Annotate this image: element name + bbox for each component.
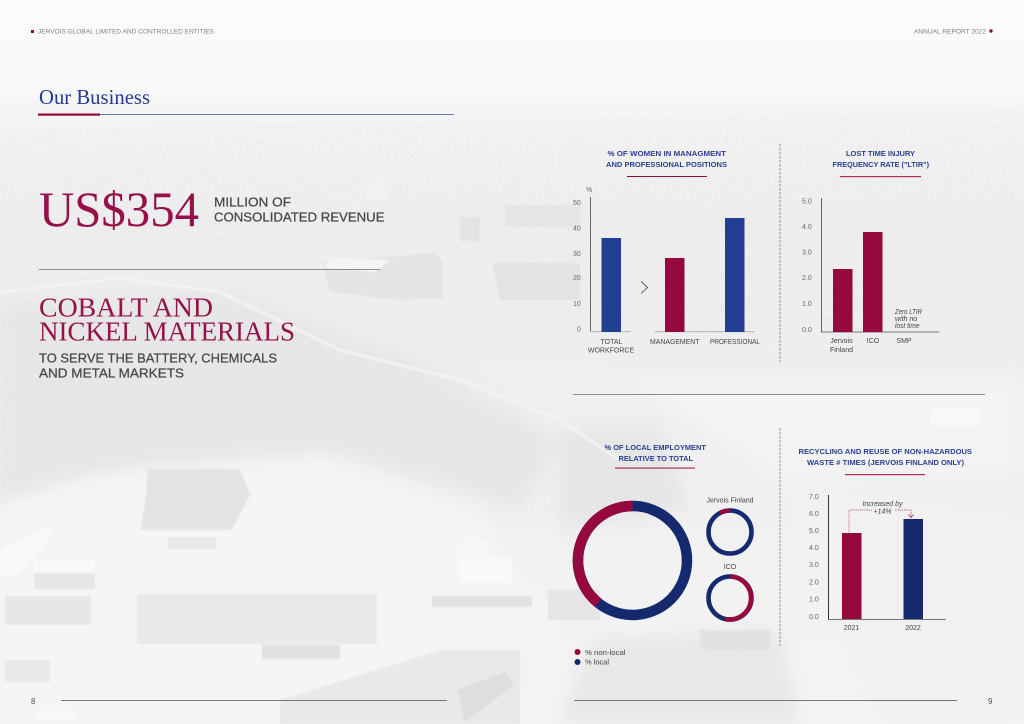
y axis: women: 10 [573, 301, 581, 308]
chart heading: LTIR: LOST TIME INJURY [846, 149, 915, 158]
note: zero LTIR: with no [895, 316, 917, 323]
chart heading: women [606, 149, 727, 177]
x labels: recycling: 2021 [844, 625, 859, 632]
forest texture [0, 110, 1024, 520]
y axis: LTIR: 5.0 [802, 198, 812, 206]
legend: % local [585, 660, 609, 666]
header: right running title: ANNUAL REPORT 2022 [914, 28, 986, 36]
y axis: women: 50 [573, 200, 581, 207]
x labels: LTIR: SMP [896, 338, 912, 345]
x labels: women: PROFESSIONAL [710, 339, 760, 346]
headline: cobalt and nickel materials: NICKEL MATERIALS [39, 316, 295, 346]
bars: LTIR [833, 232, 882, 332]
chart heading: local employment [604, 443, 706, 469]
panel: women in management chart [573, 149, 760, 354]
x labels: recycling [844, 625, 921, 632]
header: left running title: JERVOIS GLOBAL LIMITED AND CONTROLLED ENTITIES [38, 28, 215, 36]
note: zero LTIR: Zero LTIR [894, 309, 922, 316]
y axis: LTIR [802, 198, 939, 334]
x labels: LTIR [830, 338, 912, 354]
y axis: recycling: 0.0 [809, 614, 819, 621]
chart heading: local employment: RELATIVE TO TOTAL [618, 454, 693, 463]
y axis: recycling: 1.0 [809, 596, 819, 604]
x labels: women: TOTAL [601, 339, 623, 346]
chart heading: local employment: % OF LOCAL EMPLOYMENT [604, 443, 706, 452]
x labels: LTIR: Jervois [830, 338, 853, 345]
label: Jervois Finland: Jervois Finland [706, 498, 754, 504]
annotation: increased by 14% [849, 501, 914, 532]
chart heading: recycling: RECYCLING AND REUSE OF NON-HAZARDOUS [798, 447, 972, 456]
buildings and roads [323, 253, 443, 300]
annotation: increased by 14%: +14% [873, 508, 892, 516]
label: ICO: ICO [724, 564, 737, 571]
x labels: recycling: 2022 [905, 625, 921, 632]
chart heading: LTIR: FREQUENCY RATE ("LTIR") [832, 160, 929, 169]
footer: right page number: 9 [988, 697, 993, 706]
x labels: women: WORKFORCE [588, 348, 634, 354]
y axis: women: 40 [573, 226, 581, 232]
chart heading: women: AND PROFESSIONAL POSITIONS [606, 160, 727, 169]
y axis: women [573, 187, 755, 334]
y axis: women: 20 [573, 275, 581, 282]
y axis: women: % [586, 187, 592, 194]
y axis: LTIR: 0.0 [802, 327, 812, 334]
donut: ICO [708, 576, 752, 620]
headline: cobalt and nickel materials: COBALT AND [39, 292, 213, 322]
note: zero LTIR [894, 309, 922, 330]
x labels: women: MANAGEMENT [650, 339, 700, 346]
panel: local employment donuts [574, 443, 754, 666]
chart heading: LTIR [832, 149, 929, 177]
note: zero LTIR: lost time [895, 323, 920, 330]
panel: recycling chart [798, 447, 972, 632]
chart heading: women: % OF WOMEN IN MANAGMENT [608, 149, 726, 158]
revenue stat [39, 181, 385, 237]
y axis: recycling: 5.0 [809, 528, 819, 535]
y axis: recycling [809, 494, 946, 621]
chart heading: recycling: WASTE # TIMES (JERVOIS FINLAND ONLY) [807, 458, 964, 467]
legend: % non-local [585, 650, 626, 657]
panel: LTIR chart [802, 149, 939, 354]
donut: Jervois Finland [708, 510, 752, 554]
bars: women [602, 218, 744, 332]
y axis: LTIR: 3.0 [802, 250, 812, 256]
page heading: Our Business: Our Business [39, 85, 150, 109]
donut: total [578, 506, 687, 615]
bars: recycling [842, 519, 923, 619]
legend [574, 649, 626, 666]
subheading: markets served: TO SERVE THE BATTERY, CHEMICALS [39, 350, 277, 366]
x labels: women [588, 339, 760, 354]
y axis: recycling: 4.0 [809, 545, 819, 552]
chart heading: recycling [798, 447, 972, 475]
x labels: LTIR: Finland [830, 347, 853, 354]
annotation: increased by 14%: Increased by [862, 501, 903, 508]
headline: cobalt and nickel materials [39, 292, 295, 346]
revenue stat: MILLION OF [214, 194, 291, 210]
y axis: LTIR: 2.0 [802, 275, 812, 282]
y axis: recycling: 2.0 [809, 580, 819, 586]
y axis: LTIR: 1.0 [802, 301, 812, 308]
x labels: LTIR: ICO [867, 338, 880, 345]
subheading: markets served [39, 350, 277, 380]
y axis: recycling: 6.0 [809, 511, 819, 518]
y axis: recycling: 3.0 [809, 562, 819, 569]
y axis: women: 0 [577, 326, 581, 334]
arrow: chevron [641, 282, 648, 294]
y axis: recycling: 7.0 [809, 494, 819, 501]
y axis: women: 30 [573, 251, 581, 258]
revenue stat: US$354 [39, 181, 199, 237]
y axis: LTIR: 4.0 [802, 224, 812, 231]
revenue stat: CONSOLIDATED REVENUE [214, 210, 385, 224]
footer: left page number: 8 [31, 697, 36, 706]
subheading: markets served: AND METAL MARKETS [39, 366, 184, 380]
